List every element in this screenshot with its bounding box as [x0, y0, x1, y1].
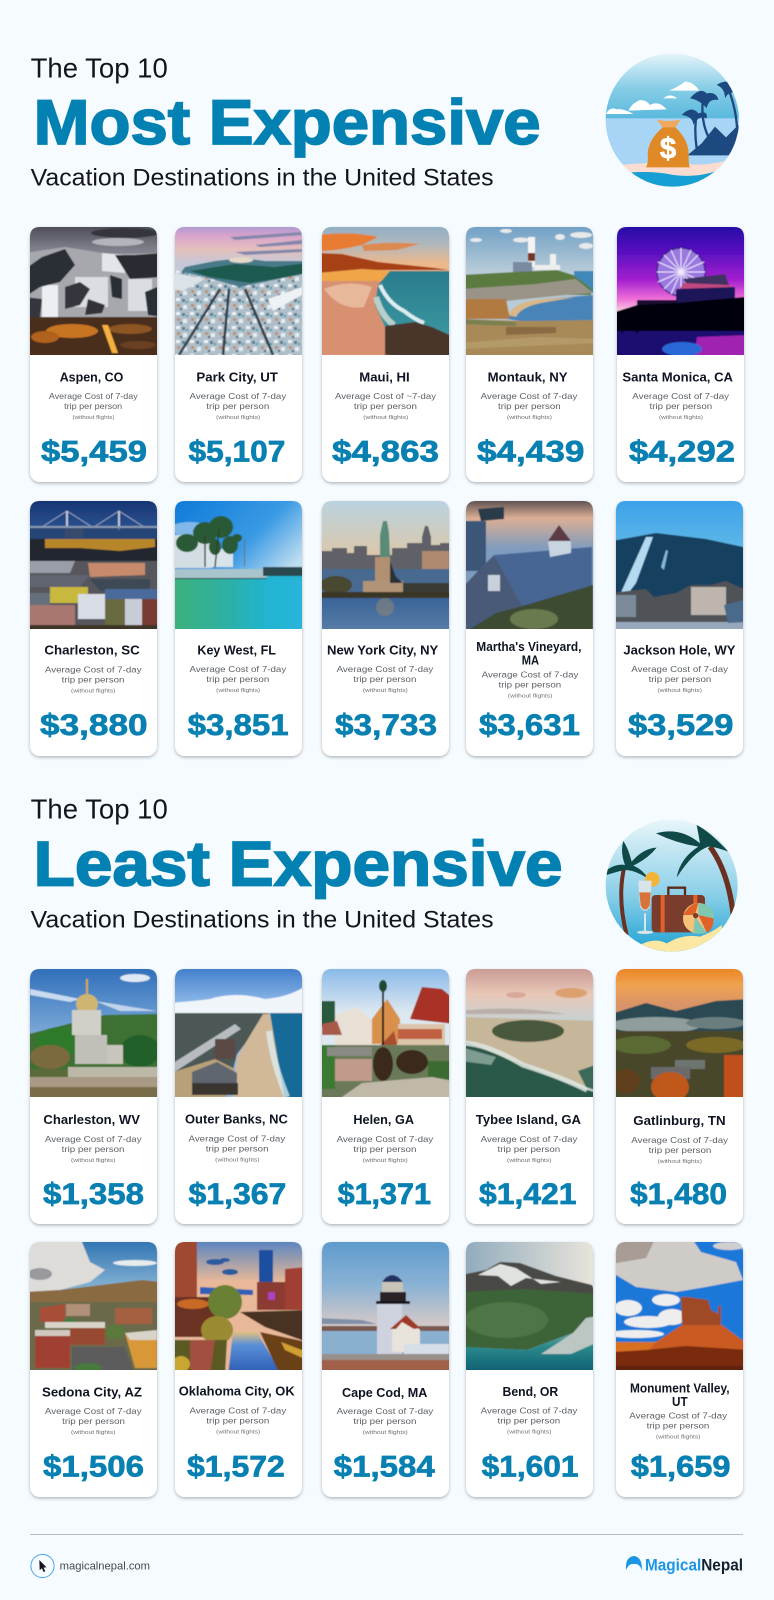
description — [337, 1134, 434, 1164]
photo: Sedona town — [30, 1242, 157, 1370]
card: Charleston, SC — [25, 496, 162, 756]
description: Average Cost of 7-day — [45, 664, 142, 674]
price: $4,292 — [629, 436, 735, 469]
name: Monument Valley, — [630, 1381, 730, 1396]
description — [631, 1135, 729, 1165]
description — [629, 1411, 728, 1441]
name: UT — [672, 1394, 688, 1409]
description: trip per person — [62, 1144, 125, 1154]
card: Oklahoma City, OK — [170, 1237, 307, 1497]
icon: money bag on island — [606, 54, 739, 187]
name: Gatlinburg, TN — [633, 1113, 726, 1128]
price: $4,863 — [332, 436, 439, 469]
name — [476, 639, 581, 668]
name: Montauk, NY — [488, 370, 568, 385]
name: Outer Banks, NC — [185, 1112, 288, 1126]
name: Helen, GA — [353, 1112, 415, 1127]
card: Charleston, WV — [25, 964, 162, 1224]
price: $1,367 — [188, 1178, 286, 1211]
card: Sedona City, AZ — [25, 1237, 162, 1497]
description — [481, 1134, 578, 1164]
description: (without flights) — [507, 1429, 552, 1435]
price: $1,584 — [334, 1451, 435, 1484]
description: Average Cost of 7-day — [629, 1411, 728, 1421]
photo: Aspen mountain and town — [30, 227, 157, 355]
name: Park City, UT — [196, 370, 278, 385]
main title: Least Expensive — [34, 830, 563, 900]
price: $3,733 — [335, 709, 437, 742]
photo: Maui beach — [322, 227, 449, 355]
description: trip per person — [650, 401, 712, 411]
icon: cursor in circle — [31, 1554, 54, 1578]
photo: Helen alpine village — [322, 969, 449, 1097]
card: Outer Banks, NC — [170, 964, 307, 1224]
card: Tybee Island, GA — [461, 964, 598, 1224]
description: (without flights) — [71, 688, 116, 694]
price: $3,529 — [628, 709, 734, 742]
price: $1,371 — [338, 1178, 431, 1211]
description: Average Cost of 7-day — [190, 664, 287, 674]
name: Santa Monica, CA — [622, 370, 734, 385]
website: magicalnepal.com — [60, 1560, 150, 1572]
price: $5,107 — [188, 436, 285, 469]
name: Key West, FL — [197, 642, 276, 657]
photo: West Virginia capitol — [30, 969, 157, 1097]
description: Average Cost of 7-day — [188, 1134, 286, 1144]
description: Average Cost of 7-day — [190, 391, 287, 401]
price: $3,880 — [40, 709, 148, 742]
photo: Park City aerial — [175, 227, 302, 355]
description — [45, 1406, 142, 1436]
money bag — [646, 119, 690, 167]
kicker: The Top 10 — [31, 52, 168, 83]
beach ball — [683, 903, 714, 934]
description: (without flights) — [216, 1429, 260, 1435]
description — [190, 391, 287, 421]
logo wordmark: MagicalNepal — [645, 1556, 743, 1575]
description — [481, 1405, 578, 1435]
description: Average Cost of 7-day — [45, 1406, 142, 1416]
card: Santa Monica, CA — [612, 222, 749, 482]
description: trip per person — [62, 674, 125, 684]
heading: most expensive — [31, 52, 541, 192]
price: $3,851 — [188, 709, 289, 742]
description: trip per person — [206, 401, 269, 411]
description — [482, 669, 579, 699]
card: Monument Valley, UT — [608, 1237, 748, 1497]
card: Jackson Hole, WY — [611, 496, 748, 756]
name: Aspen, CO — [60, 370, 123, 385]
card: Bend, OR — [461, 1237, 598, 1497]
description — [631, 664, 729, 694]
description: trip per person — [206, 1144, 269, 1154]
price: $4,439 — [477, 436, 584, 469]
name: Tybee Island, GA — [476, 1112, 582, 1127]
card: Park City, UT — [170, 222, 307, 482]
description: (without flights) — [658, 688, 702, 694]
description: trip per person — [354, 401, 417, 411]
dollar sign: $ — [660, 133, 676, 166]
photo: Jackson Hole mountain — [616, 501, 743, 629]
photo: Cape Cod lighthouse — [317, 1237, 454, 1375]
description: (without flights) — [656, 1435, 701, 1441]
description: trip per person — [498, 679, 561, 689]
description: Average Cost of 7-day — [481, 1405, 578, 1415]
description: (without flights) — [363, 415, 408, 421]
suitcase — [652, 888, 705, 932]
description — [632, 391, 730, 421]
cocktail — [637, 872, 660, 934]
description — [335, 391, 437, 421]
description: Average Cost of 7-day — [631, 664, 729, 674]
price: $1,572 — [187, 1451, 285, 1484]
description: Average Cost of 7-day — [482, 669, 579, 679]
photo: Statue of Liberty — [322, 501, 449, 629]
photo: Gatlinburg autumn hills — [616, 969, 743, 1097]
description: trip per person — [647, 1421, 709, 1431]
description: trip per person — [206, 674, 269, 684]
description: trip per person — [649, 674, 711, 684]
photo: Outer Banks shore — [175, 969, 302, 1097]
description: (without flights) — [215, 1158, 260, 1164]
description: (without flights) — [507, 1158, 552, 1164]
card: Aspen, CO — [25, 222, 162, 482]
description: trip per person — [498, 401, 561, 411]
card: Gatlinburg, TN — [610, 964, 748, 1224]
description: (without flights) — [71, 1158, 116, 1164]
name: Charleston, SC — [44, 642, 140, 657]
price: $5,459 — [41, 436, 147, 469]
name: Sedona City, AZ — [42, 1384, 142, 1399]
description: (without flights) — [71, 1430, 116, 1436]
description — [45, 664, 142, 694]
price: $1,421 — [479, 1178, 576, 1211]
description: Average Cost of 7-day — [632, 391, 730, 401]
description: Average Cost of ~7-day — [335, 391, 437, 401]
description — [45, 1134, 142, 1164]
description: trip per person — [649, 1145, 711, 1155]
description — [481, 391, 578, 421]
description: Average Cost of 7-day — [190, 1405, 287, 1415]
description: (without flights) — [216, 688, 260, 694]
footer: website link — [31, 1554, 150, 1578]
description: trip per person — [62, 1416, 125, 1426]
description: (without flights) — [508, 693, 552, 699]
price: $3,631 — [479, 709, 580, 742]
heading: least expensive — [31, 793, 563, 933]
description: trip per person — [498, 1415, 560, 1425]
name: MA — [522, 653, 540, 668]
kicker: The Top 10 — [31, 793, 168, 824]
card: Key West, FL — [170, 496, 307, 756]
description: Average Cost of 7-day — [337, 1134, 434, 1144]
subtitle: Vacation Destinations in the United States — [31, 165, 494, 192]
description: (without flights) — [363, 1430, 408, 1436]
name: Charleston, WV — [43, 1112, 140, 1127]
subtitle: Vacation Destinations in the United States — [31, 906, 494, 933]
description: Average Cost of 7-day — [49, 391, 138, 401]
description — [337, 1406, 434, 1436]
description — [190, 664, 287, 694]
description — [190, 1405, 287, 1435]
name: Cape Cod, MA — [342, 1385, 428, 1400]
description: trip per person — [498, 1144, 560, 1154]
description: (without flights) — [659, 415, 703, 421]
description: Average Cost of 7-day — [45, 1134, 142, 1144]
card: Helen, GA — [317, 964, 454, 1224]
photo: Key West palms and water — [175, 501, 302, 629]
name: Maui, HI — [359, 370, 410, 385]
price: $1,506 — [43, 1451, 144, 1484]
description: trip per person — [353, 1416, 417, 1426]
card: Maui, HI — [317, 222, 454, 482]
photo: Oklahoma City canal — [170, 1237, 307, 1375]
name — [630, 1381, 730, 1409]
card: Montauk, NY — [461, 222, 598, 482]
description: Average Cost of 7-day — [337, 1406, 434, 1416]
photo: Montauk lighthouse — [466, 227, 593, 355]
description: Average Cost of 7-day — [631, 1135, 729, 1145]
description: trip per person — [64, 401, 122, 411]
price: $1,358 — [43, 1178, 144, 1211]
price: $1,659 — [631, 1451, 730, 1484]
description: trip per person — [206, 1415, 269, 1425]
description — [337, 664, 434, 694]
card: New York City, NY — [317, 496, 454, 756]
logo mark — [626, 1556, 642, 1570]
photo: Charleston SC skyline — [30, 501, 157, 629]
photo: Tybee Island aerial — [466, 969, 593, 1097]
description: (without flights) — [363, 688, 408, 694]
description: (without flights) — [507, 415, 552, 421]
description: Average Cost of 7-day — [481, 391, 578, 401]
name: Oklahoma City, OK — [179, 1384, 295, 1399]
name: New York City, NY — [327, 642, 439, 657]
description: Average Cost of 7-day — [481, 1134, 578, 1144]
photo: Santa Monica pier — [617, 227, 744, 355]
icon: suitcase and cocktail under palms — [606, 820, 738, 952]
description: trip per person — [353, 1144, 417, 1154]
main title: Most Expensive — [34, 88, 541, 158]
footer: MagicalNepal logo — [626, 1556, 743, 1575]
description: (without flights) — [72, 415, 115, 421]
name: Martha's Vineyard, — [476, 639, 581, 654]
photo: Martha's Vineyard house — [466, 501, 593, 629]
name: Bend, OR — [502, 1384, 559, 1399]
description — [188, 1134, 286, 1164]
description — [49, 391, 138, 421]
description: Average Cost of 7-day — [337, 664, 434, 674]
price: $1,601 — [482, 1451, 578, 1484]
photo: Bend mountain and lake — [461, 1237, 598, 1375]
price: $1,480 — [630, 1178, 727, 1211]
description: trip per person — [353, 674, 417, 684]
card: Cape Cod, MA — [317, 1237, 454, 1497]
name: Jackson Hole, WY — [623, 642, 736, 657]
description: (without flights) — [658, 1159, 702, 1165]
photo: Monument Valley butte — [608, 1237, 748, 1375]
card: Martha's Vineyard, MA — [461, 496, 598, 756]
description: (without flights) — [363, 1158, 408, 1164]
description: (without flights) — [216, 415, 260, 421]
